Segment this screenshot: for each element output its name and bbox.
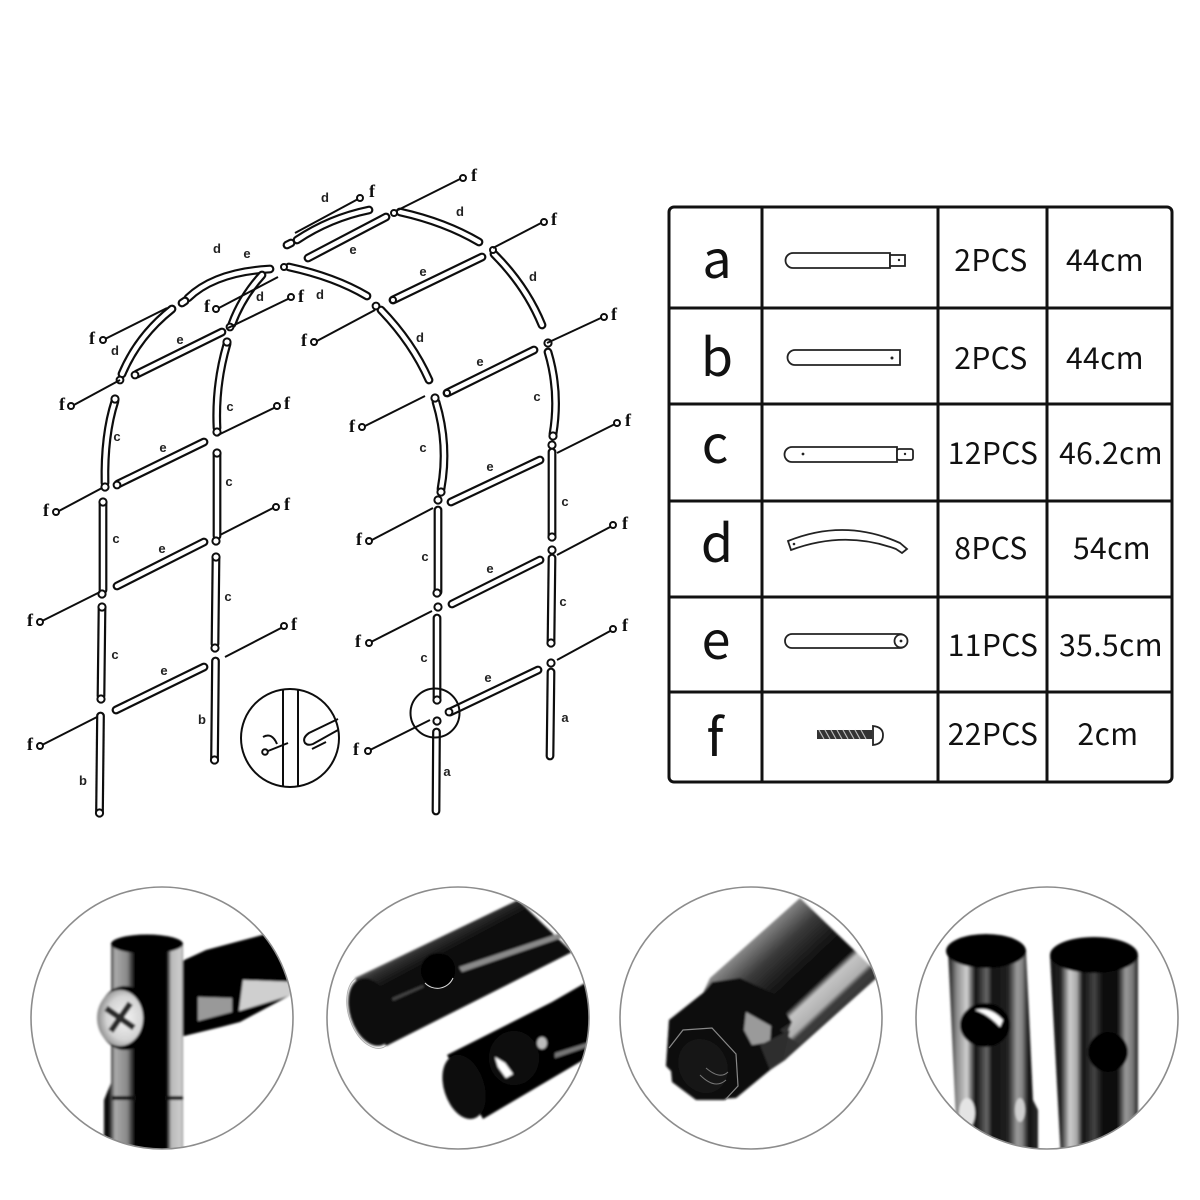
bolt labels f: f [622, 513, 629, 533]
near-left arch tubes [100, 269, 270, 812]
part letter labels: d [111, 343, 119, 358]
part letter labels: e [160, 663, 168, 678]
bolt labels f: f [611, 304, 618, 324]
row f [707, 696, 1138, 771]
part letter labels: d [529, 269, 537, 284]
part letter labels: c [421, 549, 429, 564]
part letter labels: e [243, 246, 251, 261]
row b [701, 316, 1144, 391]
part letter labels: b [79, 773, 87, 788]
part letter labels: c [559, 594, 567, 609]
far-right arch tubes [400, 212, 556, 756]
bolt labels f: f [471, 165, 478, 185]
detail marker circle [410, 688, 460, 738]
photo circle 2: two tubes with holes [327, 887, 600, 1149]
row f: 22PCS [948, 710, 1038, 754]
bolt labels f: f [204, 296, 211, 316]
row d [701, 502, 1151, 577]
bolt labels f: f [89, 328, 96, 348]
bolt labels f: f [284, 494, 291, 514]
bolt labels f: f [27, 734, 34, 754]
bolt labels f: f [59, 394, 66, 414]
part letter labels: c [561, 494, 569, 509]
part letter labels: d [456, 204, 464, 219]
left bay crossbars [116, 217, 386, 710]
part letter labels: e [486, 561, 494, 576]
row f: f [707, 696, 726, 771]
row f: 2cm [1078, 710, 1138, 754]
row b: b [701, 316, 733, 391]
near-right arch tubes [289, 267, 444, 811]
part letter labels: d [316, 287, 324, 302]
bolt labels f: f [301, 330, 308, 350]
part letter labels: d [256, 289, 264, 304]
row a: a [702, 218, 732, 293]
part letter labels: e [159, 440, 167, 455]
bolt labels f [27, 165, 632, 759]
row a: 44cm [1066, 236, 1144, 280]
bolt labels f: f [369, 181, 376, 201]
part letter labels: c [533, 389, 541, 404]
part letter labels: e [176, 332, 184, 347]
parts table [669, 207, 1172, 782]
row c: 46.2cm [1059, 429, 1163, 473]
bolt labels f: f [622, 615, 629, 635]
part letter labels: c [419, 440, 427, 455]
bolt labels f: f [284, 393, 291, 413]
photo circle 3: tube end with threaded nut [620, 887, 882, 1149]
bolt labels f: f [298, 286, 305, 306]
row d: d [701, 502, 733, 577]
inset: joint detail [241, 689, 339, 787]
row e: 11PCS [948, 621, 1038, 665]
far-left arch tubes [214, 210, 369, 760]
row b: 2PCS [954, 334, 1028, 378]
part letter labels: a [561, 710, 569, 725]
row c: 12PCS [948, 429, 1038, 473]
part letter labels: e [476, 354, 484, 369]
row d: 54cm [1073, 524, 1151, 568]
part letter labels [79, 190, 569, 788]
bolt labels f: f [355, 631, 362, 651]
part letter labels: c [111, 647, 119, 662]
part letter labels: e [349, 242, 357, 257]
row e: 35.5cm [1059, 621, 1163, 665]
row e [702, 599, 1163, 674]
part letter labels: c [225, 474, 233, 489]
row a [702, 218, 1144, 293]
connector pin ends [96, 210, 557, 817]
row c: c [702, 403, 728, 478]
bolt labels f: f [27, 610, 34, 630]
bolt labels f: f [551, 209, 558, 229]
row c [702, 403, 1163, 478]
part letter labels: c [226, 399, 234, 414]
part letter labels: c [420, 650, 428, 665]
part letter labels: c [113, 429, 121, 444]
part letter labels: e [158, 541, 166, 556]
part letter labels: b [198, 712, 206, 727]
part letter labels: e [419, 264, 427, 279]
photo circle 4: two upright tubes with holes [916, 887, 1178, 1160]
bolt labels f: f [349, 416, 356, 436]
photo circle 1: joint with screw [31, 887, 300, 1160]
bolts f with leader lines [37, 175, 620, 754]
part letter labels: d [416, 330, 424, 345]
right bay crossbars [393, 257, 540, 712]
part letter labels: a [443, 764, 451, 779]
part letter labels: c [224, 589, 232, 604]
row e: e [702, 599, 730, 674]
assembly diagram: arch frame exploded view [27, 165, 632, 817]
bolt labels f: f [625, 410, 632, 430]
part letter labels: d [321, 190, 329, 205]
bolt labels f: f [43, 500, 50, 520]
bolt labels f: f [353, 739, 360, 759]
bolt labels f: f [356, 529, 363, 549]
part letter labels: e [484, 670, 492, 685]
bolt labels f: f [291, 614, 298, 634]
part letter labels: c [112, 531, 120, 546]
part letter labels: d [213, 241, 221, 256]
row d: 8PCS [954, 524, 1028, 568]
part letter labels: e [486, 459, 494, 474]
row b: 44cm [1066, 334, 1144, 378]
row a: 2PCS [954, 236, 1028, 280]
